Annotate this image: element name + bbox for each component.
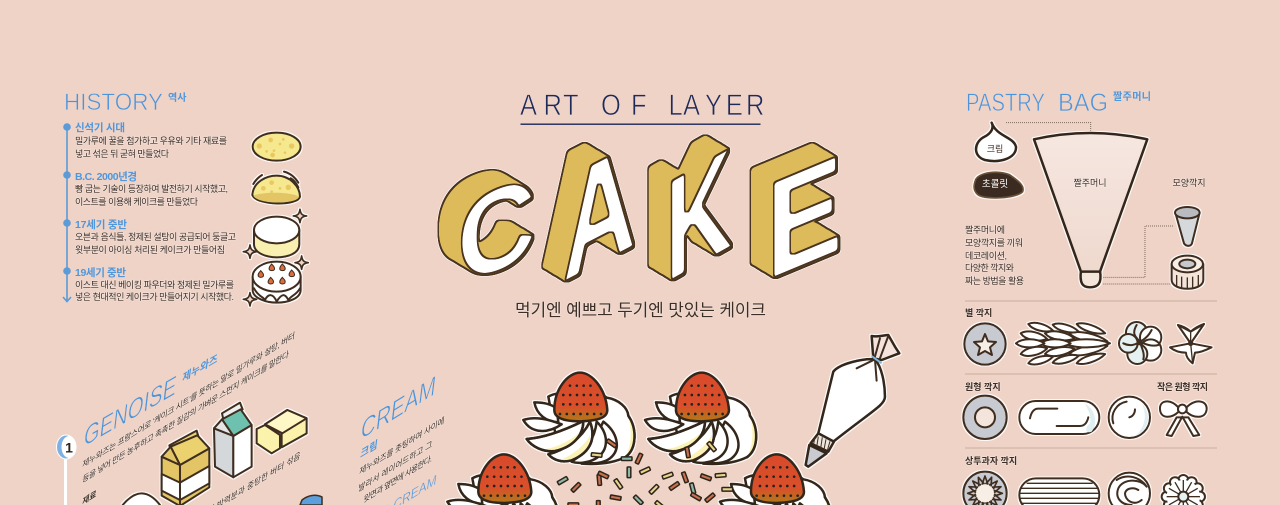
timeline entry: 19th century: 19세기 중반 [75,266,126,279]
diagram: pastry bag parts [974,123,1203,289]
timeline entry: 2000 BC [75,170,228,207]
icon: whipped cream with strawberry 2 [645,373,756,464]
icon: chocolate blob [974,172,1023,198]
row: round nozzle [963,396,1207,439]
icon: whipped cream with strawberry 3 [447,454,559,505]
heading: pastry bag: PASTRY [966,89,1045,117]
subtitle: 먹기엔 예쁘고 두기엔 맛있는 케이크 [515,301,766,320]
timeline entry: 19th century [75,266,234,302]
genoise description: 등을 넣어 만든 농후하고 촉촉한 질감의 가벼운 스펀지 케이크를 말한다 [82,347,290,485]
timeline entry: neolithic [75,121,227,159]
step badge 1 [56,435,76,505]
timeline entry: 17th century: 오븐과 음식틀, 정제된 설탕이 공급되어 둥글고 [75,231,236,242]
genoise description: 제누와즈는 프랑스어로 '케이크 시트'를 뜻하는 말로 밀가루와 설탕, 버터 [82,329,296,470]
lettering: CAKE: C [457,150,536,310]
timeline entry: 17th century [75,218,236,255]
panel: history [63,89,308,306]
heading: pastry bag [966,89,1151,117]
icon: star piped line [1016,321,1110,367]
heading: pastry bag: BAG [1058,89,1108,117]
icon: round drop [1109,397,1150,438]
icon: daisy drop [1162,475,1205,505]
panel: nozzle types [963,300,1217,505]
icon: striped piped line [1019,478,1099,505]
icon: flat cake [253,133,301,161]
icon: butter [257,410,307,453]
icon: milk carton [214,403,252,477]
icon: round tip [963,396,1007,439]
icon: star drop [1170,324,1212,363]
panel: cream [334,369,445,505]
bag part labels: 크림 [987,143,1003,154]
pastry bag description: 모양깍지를 끼워 [965,238,1023,248]
timeline entry: 17th century: 윗부분이 아이싱 처리된 케이크가 만들어짐 [75,244,225,255]
bag part labels [982,143,1206,190]
lettering: CAKE: E [766,124,843,310]
icon: piped bow [1160,401,1207,436]
heading: genoise: 제누와즈 [182,351,218,385]
icon: egg carton [162,431,209,505]
timeline entry: neolithic: 신석기 시대 [75,121,125,134]
timeline entry: 2000 BC: 이스트를 이용해 케이크를 만들었다 [75,196,199,207]
pastry bag description: 데코레이션, [965,251,1007,261]
row: choux nozzle [963,472,1205,505]
timeline entry: neolithic: 넣고 섞은 뒤 굳혀 만들었다 [75,148,170,159]
icon: round piped line [1019,401,1099,434]
heading: cream [359,369,438,461]
icon: cone nozzle [1175,207,1200,246]
bag part labels: 초콜릿 [982,178,1008,190]
pastry bag description: 짤주머니에 [965,224,1005,235]
icon: iced cake [243,209,307,258]
bag part labels: 짤주머니 [1073,177,1107,188]
lettering: CAKE: A [562,110,636,315]
panel: pastry bag [965,89,1206,289]
icon: whipped cream with strawberry 4 [720,454,831,505]
step badge 1: 1 [65,440,73,456]
cream description: 발라서 레이어드하고 그 [358,439,433,494]
icon: blue bowl [300,495,322,505]
illustration: cake top [447,335,899,505]
bag part labels: 모양깍지 [1172,178,1206,188]
sprinkles [557,439,733,505]
pastry bag description: 다양한 깍지와 [965,262,1014,273]
nozzle labels: 작은 원형 깍지 [1157,381,1208,392]
icon: star tip [964,323,1006,365]
icon: ring nozzle [1172,256,1203,289]
heading: cream: CREAM [359,369,438,446]
heading: history: 역사 [168,91,186,104]
title: ART OF LAYER [520,88,764,121]
icon: cream blob [976,123,1016,161]
timeline entry: 19th century: 넣은 현대적인 케이크가 만들어지기 시작했다. [75,291,234,302]
icon: risen cake [252,172,300,203]
timeline line with arrow [63,124,71,302]
icon: choux tip [963,472,1007,505]
timeline entry: neolithic: 밀가루에 꿀을 첨가하고 우유와 기타 재료를 [75,135,227,146]
pastry bag description [965,224,1024,286]
nozzle labels: 원형 깍지 [965,381,1001,392]
icon: filled piping bag [806,335,899,467]
nozzle labels: 상투과자 깍지 [965,455,1017,466]
lettering: CAKE: K [665,115,733,316]
heading: genoise: GENOISE [82,369,178,453]
timeline entry: 2000 BC: 빵 굽는 기술이 등장하여 발전하기 시작했고, [75,183,228,194]
icon: star rosette [1119,322,1161,364]
icon: swirl drop [1109,473,1150,505]
heading: history: HISTORY [64,89,163,116]
cream description: 제누와즈를 촛팅하여 사이에 [359,414,445,477]
row: star nozzle [964,321,1212,367]
timeline entry: 17th century: 17세기 중반 [75,218,127,231]
lettering: CAKE [457,110,843,316]
heading: pastry bag: 짤주머니 [1113,90,1151,103]
cream description [358,414,445,505]
timeline entry: 19th century: 이스트 대신 베이킹 파우더와 정제된 밀가루를 [75,279,234,290]
leader lines [1006,123,1174,284]
heading: cream: 크림 [360,437,378,461]
panel: genoise [56,329,322,505]
cream description: 윗면과 옆면에 사용한다. [363,453,433,505]
timeline entry: 2000 BC: B.C. 2000년경 [75,170,137,183]
icon: empty pastry bag [1034,133,1147,287]
pastry bag description: 짜는 방법을 활용 [965,275,1024,286]
icon: whipped cream with strawberry 1 [523,373,635,464]
nozzle labels: 별 깍지 [965,307,992,318]
icon: decorated cake [243,256,308,306]
nozzle labels [965,307,1208,466]
icon: flour sack [123,493,160,505]
